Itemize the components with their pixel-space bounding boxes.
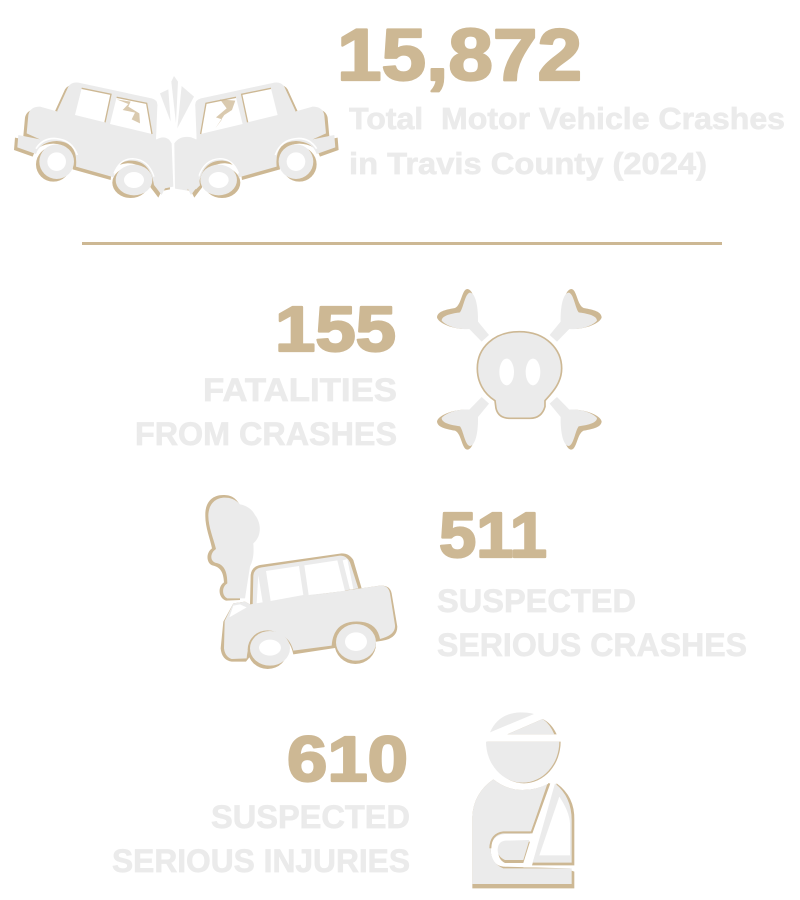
icon: head-on car crash — [14, 76, 339, 198]
serious injuries label — [112, 799, 410, 879]
smoke — [205, 495, 260, 601]
forearm in sling — [490, 783, 570, 867]
total crashes label: in Travis County (2024) — [349, 146, 707, 181]
bandaged head — [486, 712, 561, 783]
sling — [532, 783, 574, 865]
crossbones — [437, 289, 602, 450]
serious crashes label: SUSPECTED — [437, 583, 636, 619]
serious injuries number: 610 — [287, 723, 408, 795]
fatalities label: FATALITIES — [203, 372, 397, 408]
fatalities label — [135, 372, 397, 452]
serious injuries label: SUSPECTED — [211, 799, 410, 835]
serious crashes label: SERIOUS CRASHES — [437, 627, 747, 663]
car — [221, 553, 397, 669]
skull — [477, 332, 562, 418]
crumpled front bumpers — [174, 137, 200, 191]
left car — [14, 82, 173, 198]
torso — [472, 779, 574, 888]
fatalities number: 155 — [275, 293, 396, 365]
total crashes label: Total Motor Vehicle Crashes — [349, 101, 785, 136]
serious crashes number: 511 — [439, 499, 547, 571]
serious crashes label — [437, 583, 747, 663]
total crashes number: 15,872 — [337, 15, 582, 96]
icon: skull and crossbones — [437, 289, 602, 450]
right car — [179, 82, 339, 198]
serious injuries label: SERIOUS INJURIES — [112, 843, 410, 879]
impact shards — [160, 76, 194, 128]
icon: injured person with sling — [472, 712, 574, 888]
icon: smoking car — [205, 495, 397, 669]
fatalities label: FROM CRASHES — [135, 416, 397, 452]
total crashes label — [349, 101, 785, 181]
